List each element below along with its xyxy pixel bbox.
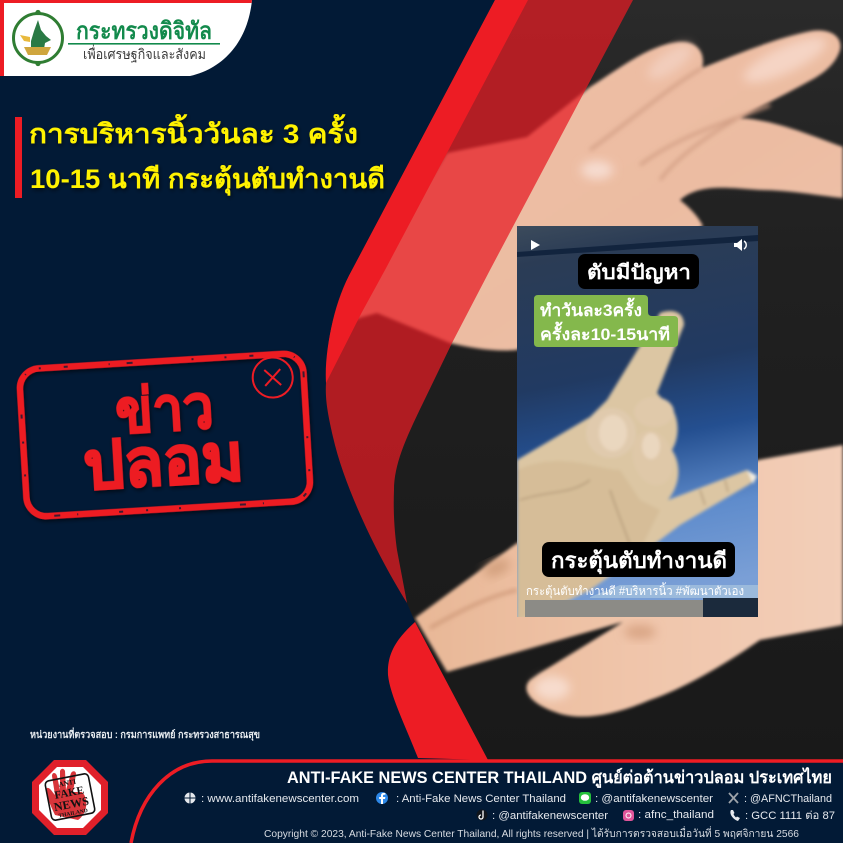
footer contact row 1 xyxy=(184,792,832,805)
icon: globe xyxy=(184,792,196,804)
x account: : @AFNCThailand xyxy=(744,793,832,805)
copyright line: Copyright © 2023, Anti-Fake News Center Thailand, All rights reserved | ได้รับการตรวจสอบเมื่อวันที่ 5 พฤศจิกายน 2566 xyxy=(264,826,799,840)
decorative bright red band xyxy=(326,0,528,383)
label: green instructions xyxy=(534,295,678,347)
icon: anti-fake news stop sign: FAKE xyxy=(53,784,85,802)
icon: instagram xyxy=(623,810,634,821)
caption strip: กระตุ้นตับทำงานดี #บริหารนิ้ว #พัฒนาตัวเอง xyxy=(526,582,744,599)
source agency text: หน่วยงานที่ตรวจสอบ : กรมการแพทย์ กระทรวงสาธารณสุข xyxy=(30,727,260,741)
instagram account: : afnc_thailand xyxy=(638,809,714,821)
video hand xyxy=(517,311,757,625)
stamp word 1: ข่าว xyxy=(114,373,215,446)
caption strip xyxy=(525,582,758,617)
icon: tiktok xyxy=(476,810,488,820)
icon: anti-fake news stop sign: THAILAND xyxy=(58,808,88,819)
label: liver problem: ตับมีปัญหา xyxy=(587,261,691,284)
label: green instructions: ทำวันละ3ครั้ง xyxy=(540,297,642,320)
icon: line xyxy=(579,792,591,804)
footer heading: ANTI-FAKE NEWS CENTER THAILAND ศูนย์ต่อต้านข่าวปลอม ประเทศไทย xyxy=(287,767,832,789)
decorative dark red translucent band xyxy=(326,0,633,603)
label: green instructions: ครั้งละ10-15นาที xyxy=(540,321,670,344)
header logo panel xyxy=(0,0,252,76)
label: liver works well xyxy=(542,542,735,577)
upper hand xyxy=(352,30,843,351)
icon: volume xyxy=(734,239,746,251)
title line 2: 10-15 นาที กระตุ้นตับทำงานดี xyxy=(30,164,385,196)
icon: phone xyxy=(730,810,740,821)
ministry tagline: เพื่อเศรษฐกิจและสังคม xyxy=(83,45,206,63)
phone number: : GCC 1111 ต่อ 87 xyxy=(745,810,835,822)
finger creases xyxy=(590,68,770,180)
facebook name: : Anti-Fake News Center Thailand xyxy=(396,793,566,805)
icon: x circle xyxy=(252,356,294,399)
footer curve xyxy=(131,761,843,843)
website: : www.antifakenewscenter.com xyxy=(201,793,359,805)
label: liver problem xyxy=(578,254,699,289)
lower hand xyxy=(415,445,843,717)
stamp word 2: ปลอม xyxy=(81,419,246,503)
icon: anti-fake news stop sign: ANTI xyxy=(58,778,77,789)
photo: hands on dark background xyxy=(326,0,843,760)
title line 1: การบริหารนิ้ววันละ 3 ครั้ง xyxy=(29,113,358,149)
icon: facebook xyxy=(376,792,388,804)
title block xyxy=(15,113,385,198)
footer contact row 2 xyxy=(476,809,835,822)
stamp: fake news xyxy=(19,353,311,517)
icon: anti-fake news stop sign xyxy=(32,760,108,835)
icon: anti-fake news stop sign: NEWS xyxy=(53,794,90,814)
label: liver works well: กระตุ้นตับทำงานดี xyxy=(551,548,727,575)
icon: ministry emblem xyxy=(14,10,62,66)
icon: x xyxy=(729,793,738,803)
icon: play xyxy=(531,240,540,250)
line account: : @antifakenewscenter xyxy=(595,793,713,805)
ministry name: กระทรวงดิจิทัล xyxy=(76,18,212,45)
decorative lower red shape xyxy=(388,622,488,760)
tiktok account: : @antifakenewscenter xyxy=(492,810,608,822)
video screenshot panel xyxy=(517,226,758,625)
